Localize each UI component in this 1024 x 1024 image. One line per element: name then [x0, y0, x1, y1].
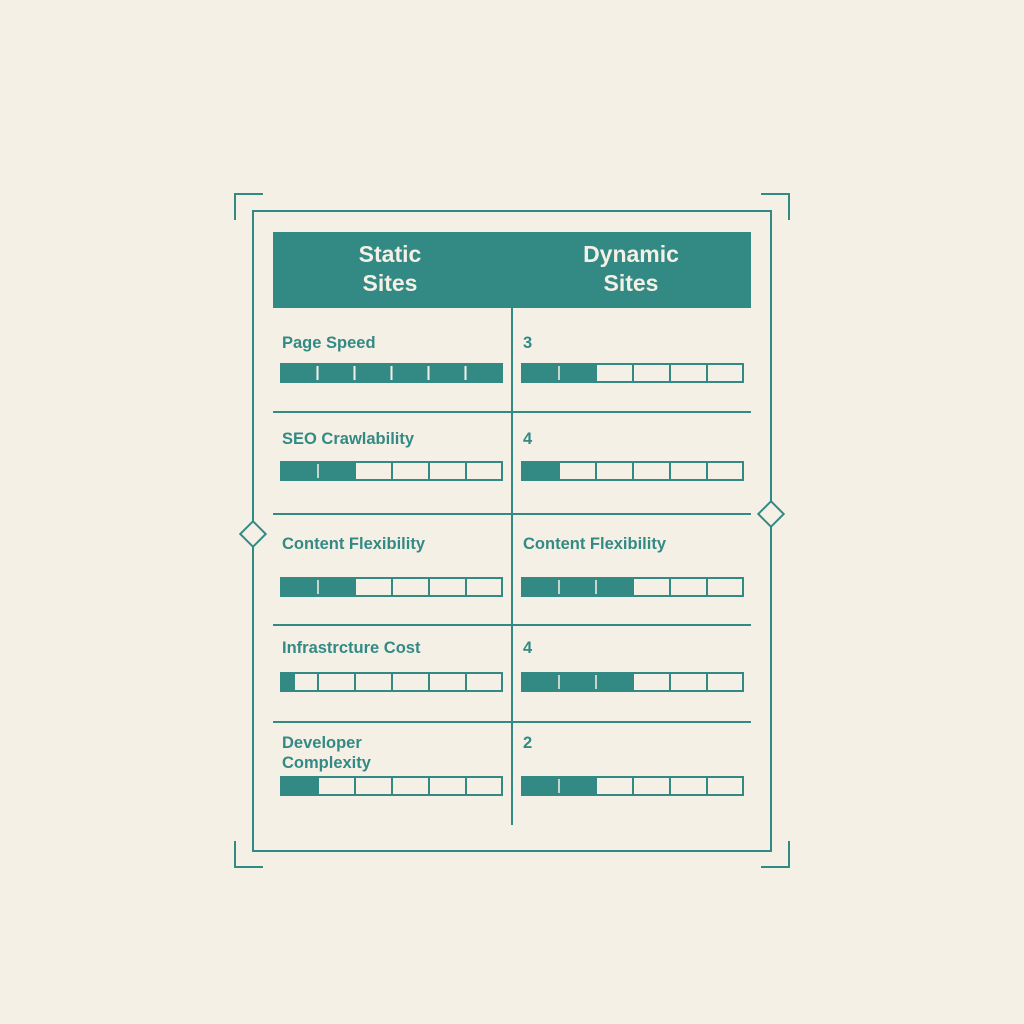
header: Sites — [604, 270, 658, 296]
header: Dynamic — [583, 241, 679, 267]
labels: 4 — [523, 639, 533, 657]
bar segment dividers — [318, 364, 707, 795]
header: Sites — [363, 270, 417, 296]
labels: 2 — [523, 734, 532, 752]
labels: Content Flexibility — [523, 535, 667, 553]
grid lines — [273, 308, 751, 825]
icon: left diamond — [240, 521, 266, 547]
frame — [235, 194, 789, 867]
labels — [282, 334, 667, 772]
labels: SEO Crawlability — [282, 430, 415, 448]
header — [273, 232, 751, 308]
labels: Page Speed — [282, 334, 376, 352]
labels: Complexity — [282, 754, 372, 772]
labels: Infrastrcture Cost — [282, 639, 421, 657]
labels: Developer — [282, 734, 362, 752]
row1 — [281, 364, 502, 582]
header: Static — [359, 241, 422, 267]
labels: Content Flexibility — [282, 535, 426, 553]
icon: right diamond — [758, 501, 784, 527]
bars — [281, 364, 743, 795]
labels: 3 — [523, 334, 532, 352]
labels: 4 — [523, 430, 533, 448]
